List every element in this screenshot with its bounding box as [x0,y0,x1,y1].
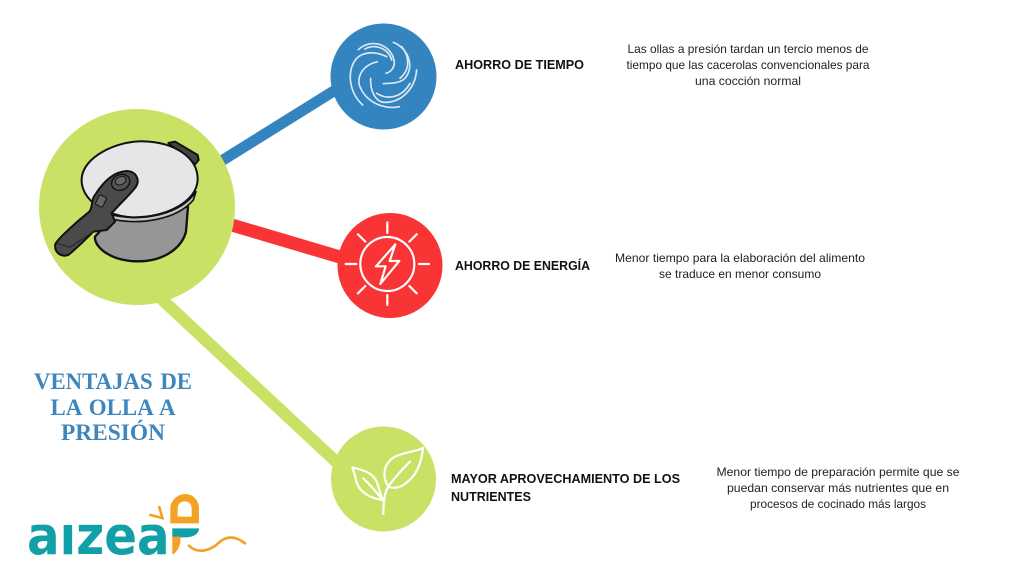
title [34,369,192,445]
heading: MAYOR APROVECHAMIENTO DE LOS [451,471,680,486]
text block: se traduce en menor consumo [659,267,821,281]
connector: green [155,293,345,470]
text block: procesos de cocinado más largos [750,497,926,511]
text block [615,251,865,281]
panel: ahorro de energía [338,213,865,318]
text block [716,465,960,511]
icon: red circle with bolt [338,213,442,318]
title: LA OLLA A [50,395,176,420]
text block: una cocción normal [695,74,801,88]
text block: puedan conservar más nutrientes que en [727,481,949,495]
title: VENTAJAS DE [34,369,192,394]
panel: pressure cooker badge [39,109,235,305]
panel: nutrientes [331,426,960,532]
text block: Menor tiempo de preparación permite que se [716,465,960,479]
text block: Menor tiempo para la elaboración del alimento [615,251,865,265]
icon: pressure cooker [55,141,199,261]
panel: ahorro de tiempo [330,24,870,130]
text block: tiempo que las cacerolas convencionales para [626,58,870,72]
heading [451,471,680,504]
logo wordmark: aizea [27,505,170,567]
heading: AHORRO DE ENERGÍA [455,258,591,273]
icon: blue circle with swirl [330,24,436,130]
text block: Las ollas a presión tardan un tercio menos de [628,42,869,56]
heading: AHORRO DE TIEMPO [455,57,584,72]
text block [626,42,870,88]
title: PRESIÓN [61,419,165,445]
logo: aizea [29,494,246,555]
logo mark [149,494,245,555]
connector: blue [215,84,345,165]
connector: red [225,223,350,260]
heading: NUTRIENTES [451,489,531,504]
icon: green circle with leaves [331,426,436,532]
